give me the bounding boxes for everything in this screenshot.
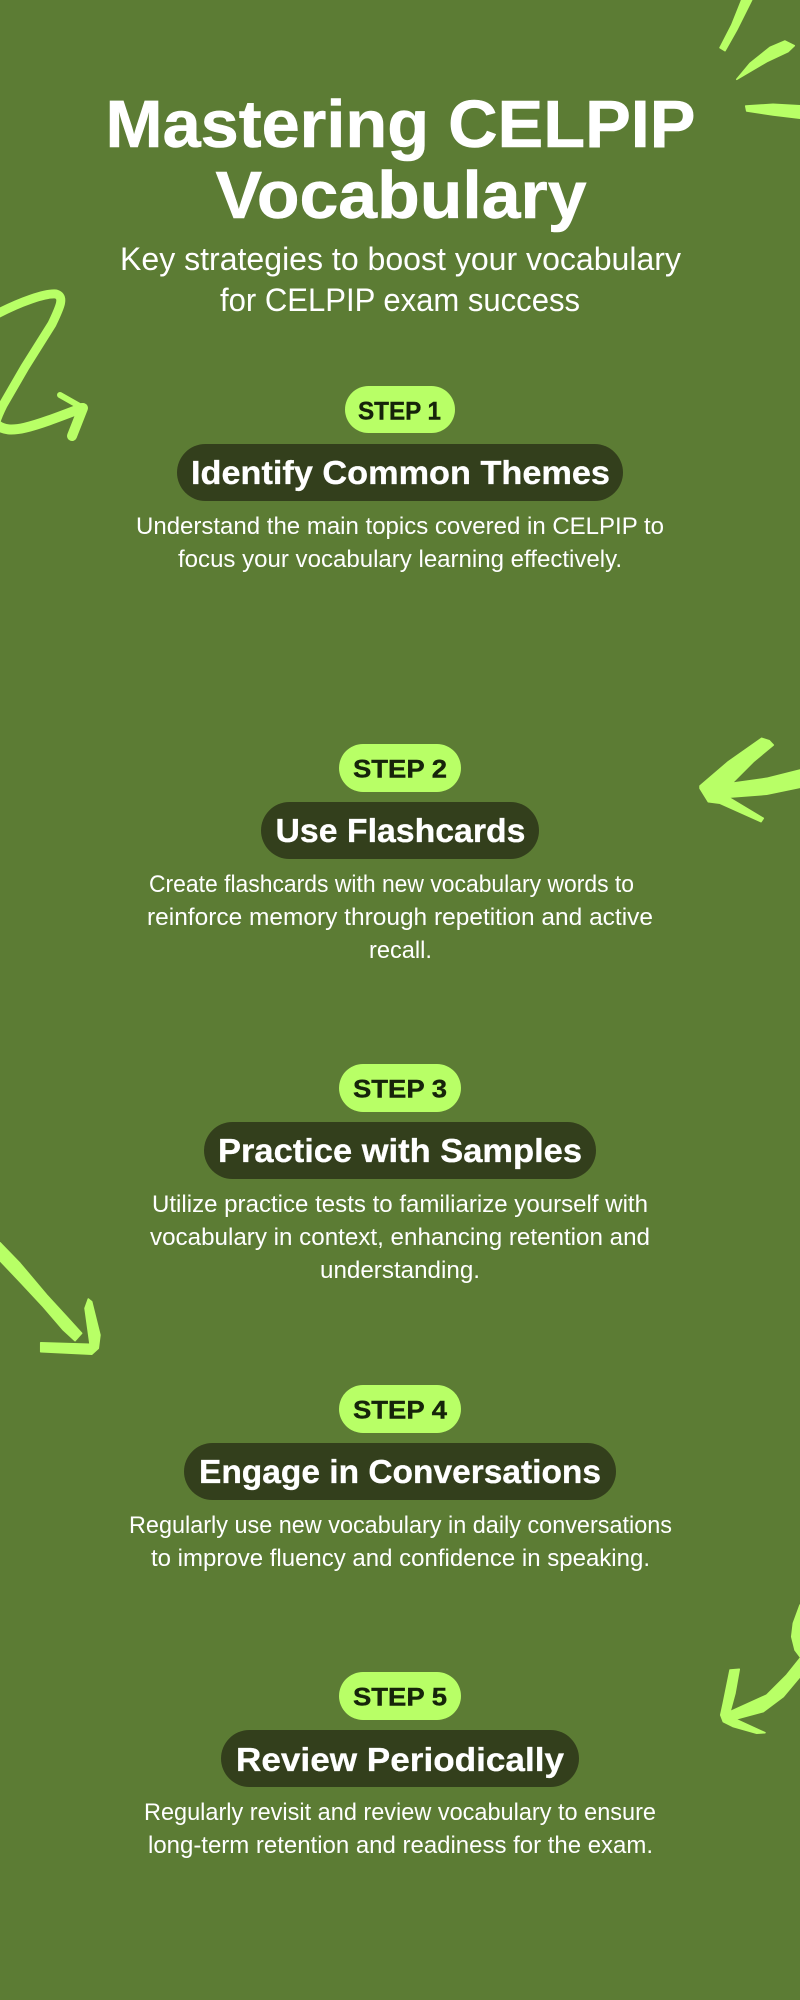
title: Vocabulary [216, 158, 586, 233]
panel: step 5 [144, 1672, 656, 1859]
step 1 badge: STEP 1 [358, 398, 441, 426]
step 2 description: Create flashcards with new vocabulary words to [149, 871, 634, 898]
step 2 description: recall. [369, 937, 432, 964]
panel: step 2 [147, 744, 653, 964]
subtitle: Key strategies to boost your vocabulary [120, 241, 681, 277]
panel: step 3 [150, 1064, 650, 1284]
title [106, 87, 696, 233]
step 1 description: Understand the main topics covered in CELPIP to [136, 513, 664, 540]
title: Mastering CELPIP [106, 87, 696, 162]
step 4 heading: Engage in Conversations [199, 1453, 601, 1490]
panel: step 1 [136, 386, 664, 573]
step 4 description [129, 1512, 672, 1572]
arrow: left arrow pointing down-right [0, 1243, 100, 1354]
icon: top-right burst strokes [720, 0, 800, 118]
step 3 description [150, 1191, 650, 1284]
step 2 description: reinforce memory through repetition and active [147, 904, 653, 931]
step 5 description [144, 1799, 656, 1859]
step 4 description: to improve fluency and confidence in speaking. [151, 1545, 650, 1572]
step 2 badge: STEP 2 [353, 756, 447, 784]
step 4 heading [184, 1443, 616, 1500]
arrow: left squiggle pointing right [0, 294, 83, 436]
panel: step 4 [129, 1385, 672, 1572]
step 3 description: vocabulary in context, enhancing retention and [150, 1224, 650, 1251]
step 4 badge [339, 1385, 461, 1433]
step 1 badge [345, 386, 455, 433]
step 2 heading: Use Flashcards [276, 812, 526, 849]
arrow: right arrow pointing left [700, 738, 800, 822]
step 5 heading: Review Periodically [236, 1741, 565, 1778]
step 3 heading: Practice with Samples [218, 1132, 582, 1169]
step 5 description: long-term retention and readiness for the exam. [148, 1832, 653, 1859]
step 1 heading: Identify Common Themes [191, 454, 610, 491]
step 2 badge [339, 744, 461, 792]
step 4 badge: STEP 4 [353, 1396, 447, 1424]
step 3 badge: STEP 3 [353, 1076, 447, 1104]
step 5 badge: STEP 5 [353, 1684, 447, 1712]
subtitle: for CELPIP exam success [220, 282, 580, 318]
step 3 badge [339, 1064, 461, 1112]
step 1 description [136, 513, 664, 573]
step 5 heading [221, 1730, 579, 1787]
step 1 heading [177, 444, 623, 501]
step 1 description: focus your vocabulary learning effectively. [178, 546, 622, 573]
step 5 description: Regularly revisit and review vocabulary to ensure [144, 1799, 656, 1826]
step 5 badge [339, 1672, 461, 1720]
step 2 heading [261, 802, 539, 859]
arrow: right curl pointing down-left [721, 1605, 800, 1733]
step 3 description: Utilize practice tests to familiarize yourself with [152, 1191, 648, 1218]
step 3 description: understanding. [320, 1257, 480, 1284]
step 2 description [147, 871, 653, 964]
step 4 description: Regularly use new vocabulary in daily conversations [129, 1512, 672, 1539]
step 3 heading [204, 1122, 596, 1179]
subtitle [120, 241, 681, 318]
